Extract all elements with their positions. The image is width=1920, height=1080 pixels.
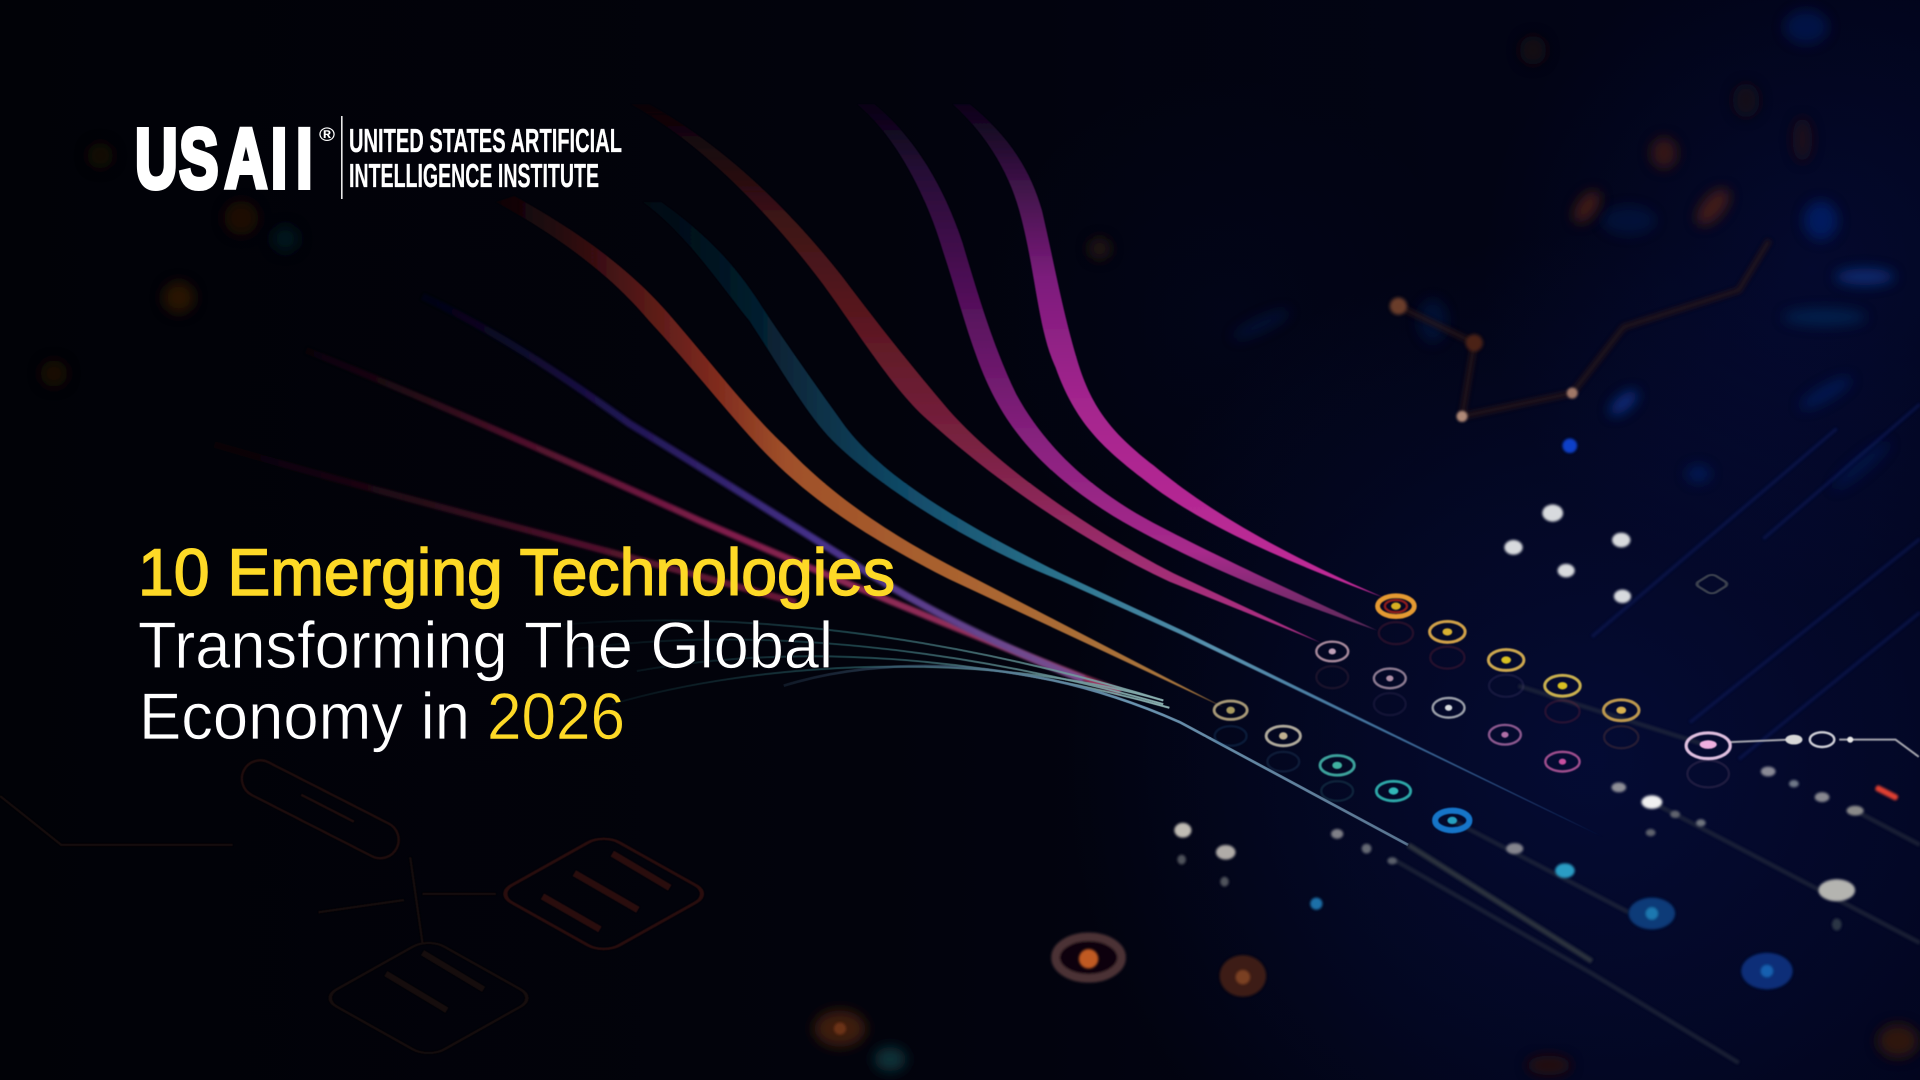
faint chip icons at lower left: [0, 754, 711, 1058]
icon: pill outline: [236, 754, 405, 865]
stream: red line: [306, 350, 1120, 692]
stream: lower pale line: [784, 666, 1408, 845]
title year: 2026: [487, 679, 625, 753]
orange circuit nodes: [1390, 298, 1578, 422]
blurred blue rings: [1629, 898, 1793, 989]
logo divider: [341, 116, 343, 199]
faint blue grid traces: [1592, 404, 1920, 759]
blurred orange rings at the bottom: [814, 937, 1919, 1075]
stream: main magenta ribbon: [953, 104, 1384, 598]
bright blue node: [1562, 438, 1577, 453]
logo organisation name: [349, 122, 622, 194]
orange circuit traces: [1398, 240, 1769, 416]
stream: purple line: [422, 296, 1084, 680]
registered mark: ®: [319, 125, 335, 146]
node rings: lower row (tan to blue): [1214, 701, 1469, 830]
logo organisation name: UNITED STATES ARTIFICIAL: [349, 122, 622, 159]
title line 3: Economy in: [139, 679, 470, 753]
logo: [135, 112, 622, 206]
title line 1: 10 Emerging Technologies: [138, 535, 895, 609]
stream: orange ribbon: [496, 196, 1224, 708]
grey diagonal lines at lower right: [1396, 686, 1920, 1063]
faint connector traces: [0, 796, 496, 943]
logo wordmark: USAII: USAII: [135, 112, 312, 206]
logo organisation name: INTELLIGENCE INSTITUTE: [349, 157, 599, 194]
stream: red to magenta ribbon: [631, 104, 1321, 643]
node rings: top row (gold): [1378, 596, 1639, 721]
icon: rounded chip with bars: [496, 834, 711, 954]
white dots: [1174, 504, 1662, 860]
stream: teal-blue ribbon: [643, 202, 1604, 838]
faint orange bokeh and nodes: [40, 36, 1812, 387]
grey and coloured small dots: [1177, 767, 1899, 931]
dim ring reflections: [1215, 622, 1729, 801]
icon: lower faint chip: [321, 938, 536, 1058]
faint blue bokeh patches: [1229, 10, 1894, 495]
title: [138, 535, 895, 753]
stream: second magenta ribbon: [857, 104, 1378, 631]
title line 2: Transforming The Global: [138, 608, 833, 682]
stream: thin green fan: [539, 620, 1169, 708]
large pink node with connector: [1686, 732, 1919, 759]
stream: dim red line: [214, 444, 796, 602]
stream: lower grey trail: [1408, 845, 1592, 961]
rounded diamond outline at right: [1695, 573, 1729, 595]
node rings: middle row (pink to magenta): [1316, 642, 1580, 771]
